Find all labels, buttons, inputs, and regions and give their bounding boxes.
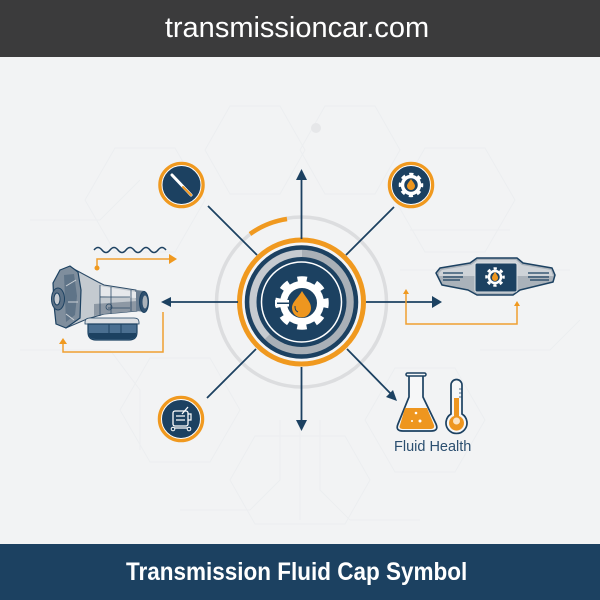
- transmission illustration: [52, 248, 177, 352]
- orange arrow top: [97, 259, 170, 268]
- orange arrow bottom: [63, 312, 163, 352]
- icon: dipstick: [160, 164, 203, 206]
- bell housing: [53, 266, 81, 328]
- orange arc: [250, 219, 287, 234]
- thermometer: [446, 380, 467, 433]
- header: [0, 0, 600, 57]
- orange bracket: [406, 292, 517, 324]
- arrowheads: [161, 169, 442, 431]
- icon: gear with drop: [390, 164, 432, 206]
- dashboard module illustration: [403, 258, 555, 324]
- icon: service cart: [160, 398, 202, 440]
- fluid health icons: [394, 373, 471, 455]
- label: Fluid Health: [394, 439, 471, 455]
- tail: [136, 290, 145, 312]
- header: transmissioncar.com: [165, 12, 429, 44]
- inner disc: [256, 257, 346, 347]
- flask: [397, 373, 437, 431]
- wave line: [94, 248, 166, 252]
- orange ring: [240, 240, 364, 364]
- central hub: [216, 217, 386, 387]
- navy ring: [247, 248, 356, 356]
- transmission body: [66, 268, 137, 328]
- oil drop: [292, 291, 311, 318]
- footer title: Transmission Fluid Cap Symbol: [126, 558, 468, 586]
- outer grey ring: [216, 217, 386, 387]
- oil pan: [85, 318, 139, 324]
- arrows from hub: [168, 178, 434, 424]
- footer title: [0, 544, 600, 600]
- gear: [275, 279, 326, 327]
